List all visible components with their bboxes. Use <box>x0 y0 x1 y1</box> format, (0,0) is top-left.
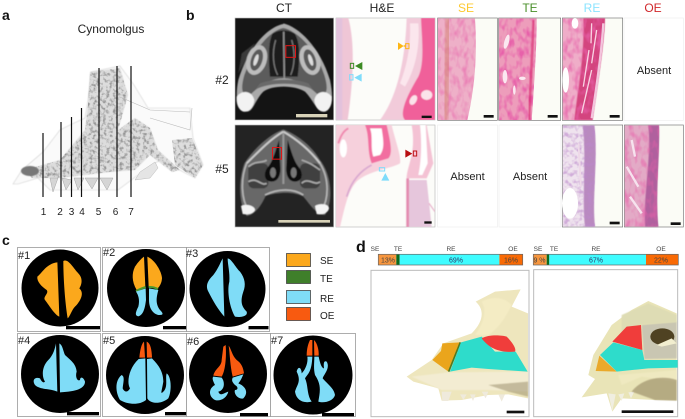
row label #2: #2 <box>215 73 229 87</box>
OE marker <box>405 150 417 158</box>
section #1 <box>18 248 100 332</box>
legend: RE <box>320 294 334 305</box>
stacked bar left: OE <box>508 246 518 253</box>
legend: OE <box>320 311 335 322</box>
section lines 1 to 7 <box>43 66 131 197</box>
stacked bar left: RE <box>446 246 456 253</box>
stacked bar left: 13% <box>381 258 395 264</box>
panel: SE #5 absent <box>438 125 498 227</box>
text: Absent TE #5: Absent <box>513 171 547 183</box>
section numbers: 6 <box>113 207 119 218</box>
section numbers: 1 <box>41 207 47 218</box>
stacked bar left: SE <box>371 246 380 253</box>
stacked bar left: TE <box>394 246 403 253</box>
H&E micrograph #5 <box>336 125 435 227</box>
label a: a <box>2 7 10 23</box>
section #6 <box>186 334 270 416</box>
stacked bar right: 67% <box>589 258 603 264</box>
stacked bar right: 9 % <box>533 258 546 264</box>
column headings: RE <box>584 1 600 15</box>
stacked bar left: 16% <box>504 258 518 264</box>
section #3 <box>186 248 270 332</box>
section numbers: 7 <box>128 207 134 218</box>
stacked bar left: 69% <box>449 258 463 264</box>
section #7: #7 <box>271 335 283 347</box>
skull illustration <box>13 60 210 195</box>
section #6: #6 <box>187 336 199 348</box>
scale bar <box>422 116 432 118</box>
section numbers: 4 <box>79 207 85 218</box>
column headings: SE <box>458 1 474 15</box>
column headings <box>276 1 662 15</box>
section #4: #4 <box>18 335 30 347</box>
stacked bar right: TE <box>550 246 559 253</box>
stacked bar right: 22% <box>654 258 668 264</box>
legend: TE <box>320 274 333 285</box>
section numbers: 2 <box>57 207 63 218</box>
heading: Cynomolgus: Cynomolgus <box>78 22 144 36</box>
stacked bar right: RE <box>591 246 601 253</box>
section #7 <box>270 334 356 416</box>
label d: d <box>356 239 366 256</box>
micrograph RE #5 <box>562 125 623 227</box>
SE marker <box>398 42 409 50</box>
section #5 <box>102 334 189 416</box>
panel: a skull with section lines <box>2 7 210 218</box>
TE marker <box>350 62 362 70</box>
section #1: #1 <box>18 250 30 262</box>
section numbers: 5 <box>96 207 102 218</box>
panel: b CT and histology <box>186 1 683 227</box>
label c: c <box>2 232 10 248</box>
section #4 <box>18 334 100 416</box>
section #5: #5 <box>103 335 115 347</box>
micrograph RE #2 <box>562 18 623 120</box>
column headings: H&E <box>370 1 394 15</box>
section numbers <box>41 207 134 218</box>
section #3: #3 <box>186 248 198 260</box>
H&E micrograph #2 <box>336 18 435 120</box>
row label #5: #5 <box>215 162 229 176</box>
legend: SE <box>320 256 334 267</box>
text: Absent OE #2: Absent <box>637 65 671 77</box>
scale bar <box>424 221 432 224</box>
stacked bar right: SE <box>534 246 543 253</box>
stacked bar right <box>533 246 678 265</box>
micrograph OE #5 <box>624 125 683 227</box>
legend <box>286 254 335 322</box>
CT scan #5 <box>235 125 334 227</box>
panel: c epithelium maps of sections <box>2 232 356 416</box>
panel: TE #5 absent <box>499 125 561 227</box>
stacked bar right: OE <box>656 246 666 253</box>
section #2 <box>102 247 187 332</box>
RE marker <box>379 168 389 181</box>
micrograph TE #2 <box>499 18 561 120</box>
micrograph SE #2 <box>438 18 497 120</box>
panel: d 3D reconstructions <box>356 239 678 417</box>
column headings: CT <box>276 1 293 15</box>
3D skull left <box>371 270 529 417</box>
panel: OE #2 absent <box>624 18 683 120</box>
text: Absent SE #5: Absent <box>450 171 485 183</box>
column headings: OE <box>644 1 662 15</box>
3D skull right <box>534 270 678 417</box>
column headings: TE <box>522 1 538 15</box>
section #2: #2 <box>103 247 115 259</box>
CT scan #2 <box>235 18 334 120</box>
RE marker <box>350 74 362 82</box>
stacked bar left <box>371 246 523 265</box>
label b: b <box>186 7 195 23</box>
section numbers: 3 <box>69 207 75 218</box>
